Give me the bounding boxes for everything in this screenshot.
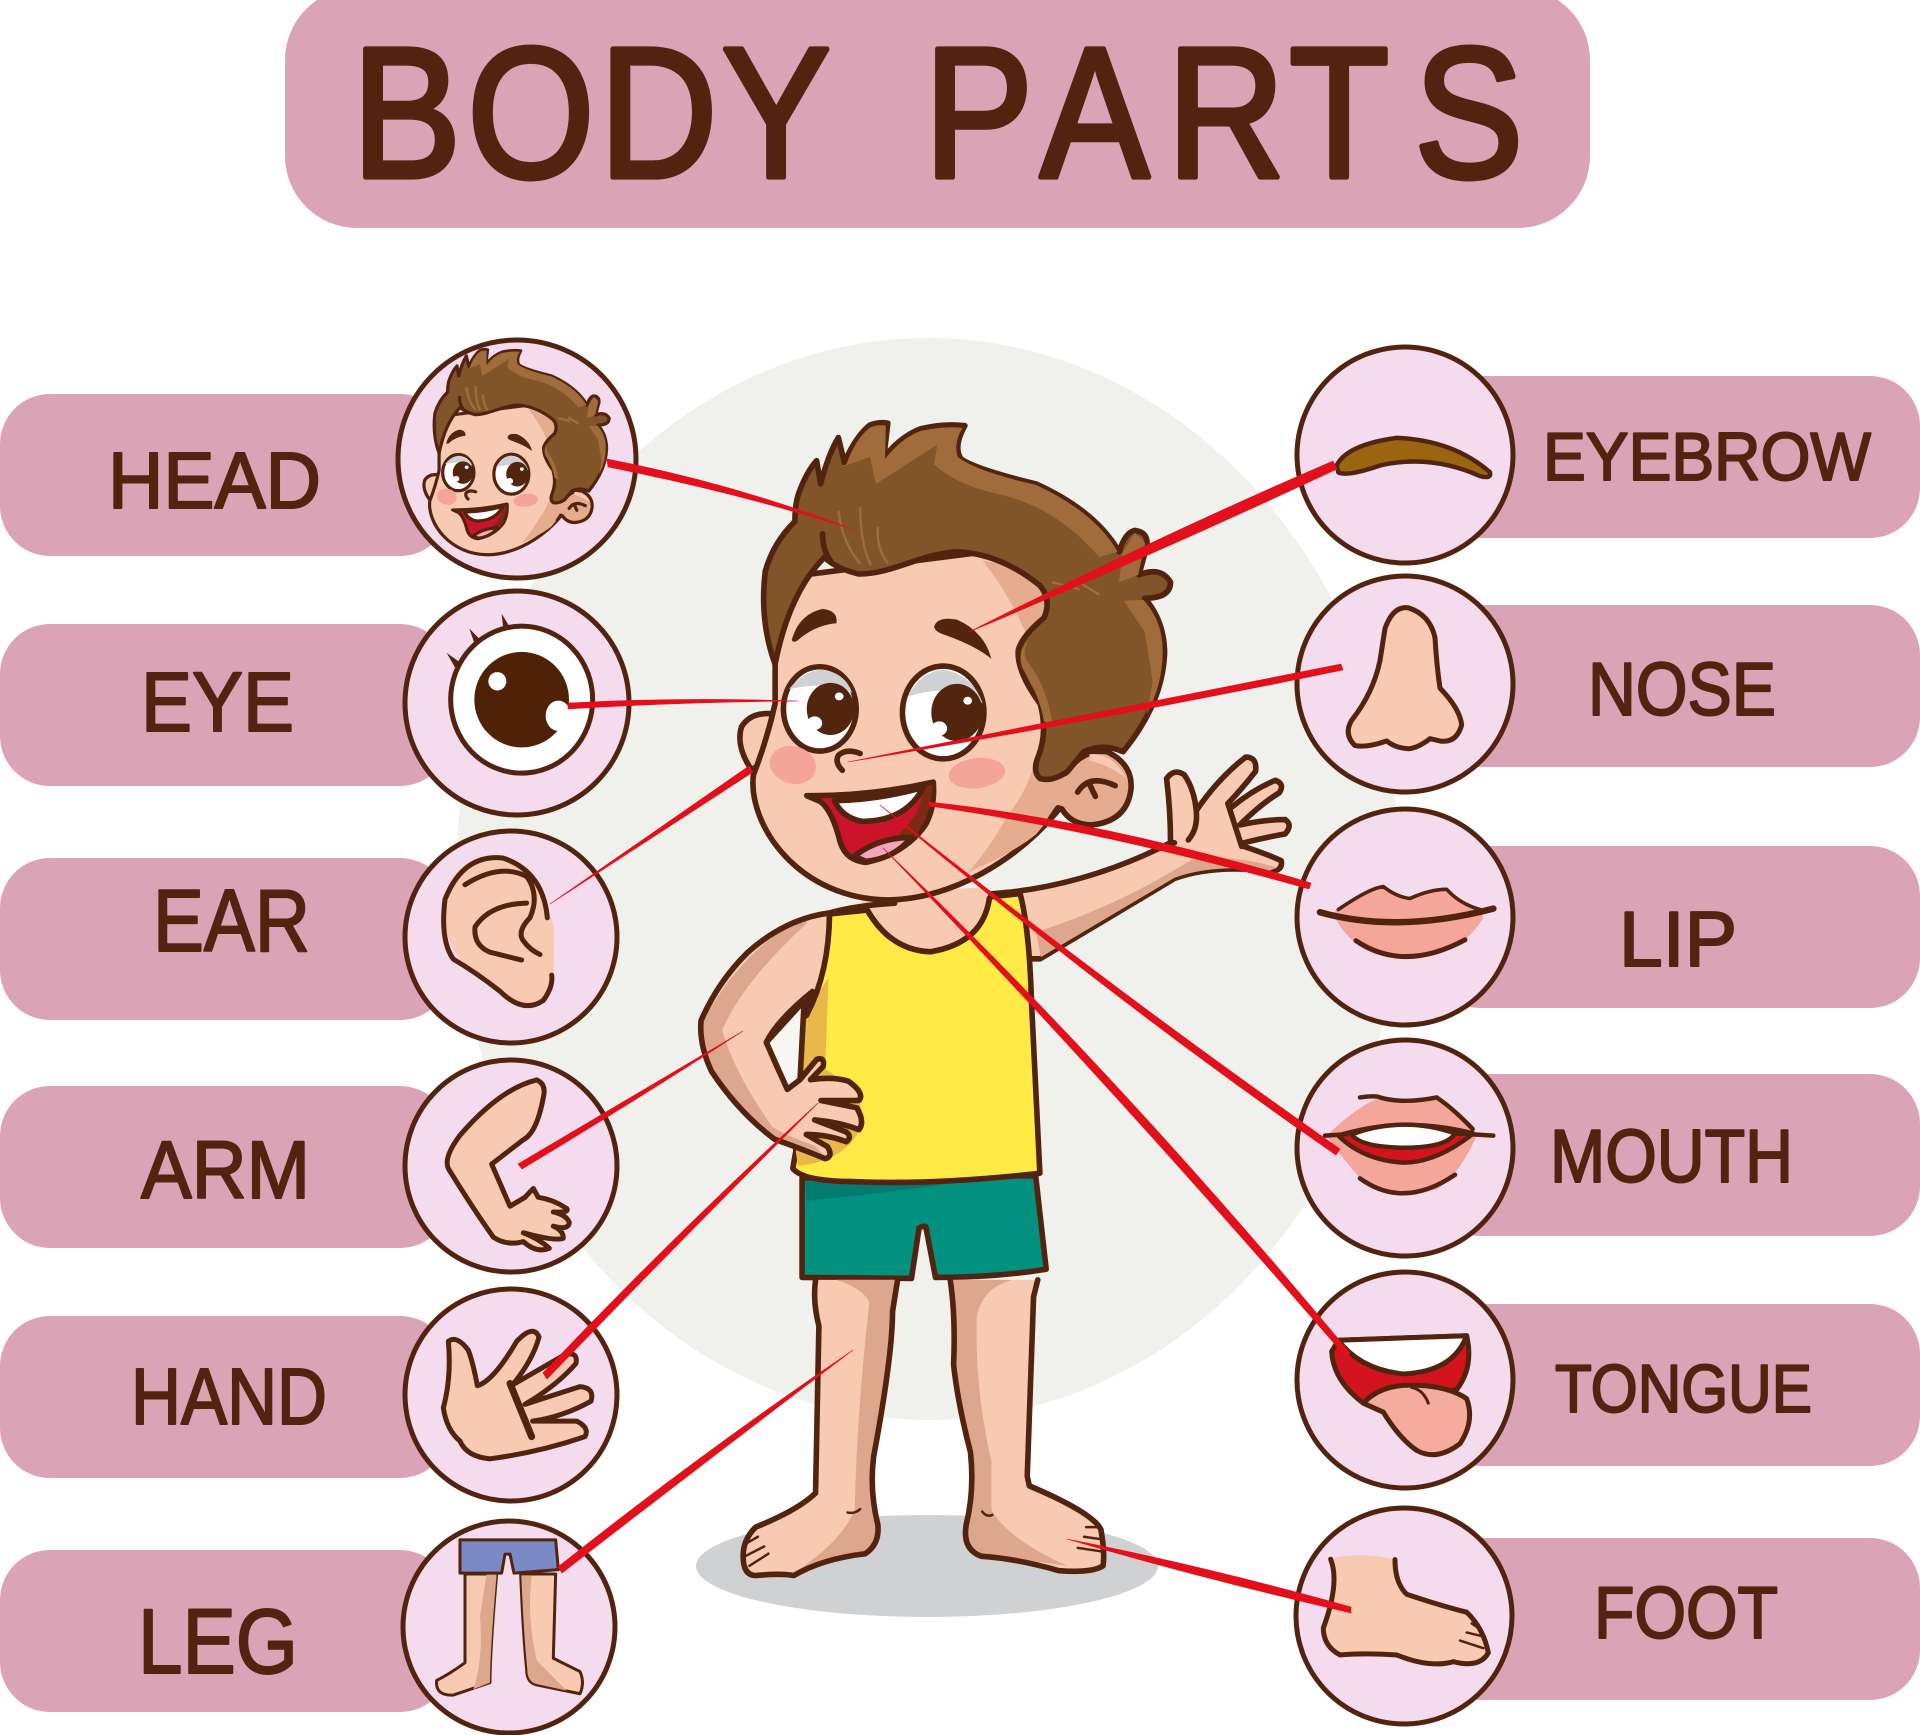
shorts	[802, 1176, 1046, 1278]
icon: lip	[1297, 809, 1513, 1025]
boy raised arm	[977, 757, 1289, 959]
line: foot	[1067, 1539, 1351, 1613]
line: lip	[929, 802, 1311, 889]
face shadow	[968, 739, 1076, 872]
icon: arm	[405, 1060, 617, 1272]
ground shadow	[696, 1515, 1158, 1617]
pointer lines	[518, 459, 1351, 1613]
bent arm	[701, 903, 895, 1159]
cheeks	[763, 739, 1007, 792]
mouth	[807, 782, 934, 862]
line: tongue	[883, 848, 1350, 1357]
boy head	[740, 423, 1171, 900]
right label pills	[1430, 376, 1920, 1700]
line: eye	[568, 699, 798, 709]
right leg	[950, 1280, 1104, 1571]
icon: ear	[405, 831, 617, 1043]
icon: tongue	[1297, 1272, 1513, 1488]
line: nose	[848, 664, 1343, 762]
icon: foot	[1296, 1508, 1512, 1724]
icon: leg	[403, 1521, 615, 1733]
label: ear: EAR	[153, 871, 310, 970]
label: arm: ARM	[141, 1125, 310, 1216]
hair highlights	[838, 425, 1118, 557]
eyebrows	[792, 609, 991, 659]
nose	[837, 751, 860, 770]
icon: eyebrow	[1297, 347, 1513, 563]
line: head	[607, 459, 852, 529]
line: arm	[518, 1031, 743, 1169]
line: eyebrow	[969, 461, 1337, 632]
label: eye: EYE	[141, 655, 294, 749]
label: foot: FOOT	[1594, 1573, 1778, 1654]
boy body	[701, 887, 1104, 1576]
icon: head	[398, 340, 636, 578]
icon: nose	[1297, 576, 1513, 792]
label: head: HEAD	[108, 436, 321, 525]
right eye	[902, 666, 984, 759]
label: eyebrow: EYEBROW	[1543, 419, 1871, 495]
icon: eye	[405, 591, 629, 815]
label: nose: NOSE	[1588, 647, 1776, 731]
label: leg: LEG	[138, 1591, 298, 1693]
icon: hand	[405, 1289, 617, 1501]
line: ear	[550, 766, 753, 904]
label: lip: LIP	[1619, 895, 1737, 983]
right ear	[1050, 751, 1131, 825]
boy character	[701, 423, 1289, 1576]
icon: mouth	[1297, 1040, 1513, 1256]
title text: BODY PARTS	[352, 9, 1523, 217]
label: mouth: MOUTH	[1550, 1114, 1793, 1198]
line: hand	[543, 1103, 818, 1379]
face	[753, 543, 1080, 900]
label: tongue: TONGUE	[1555, 1351, 1812, 1427]
hair	[764, 423, 1171, 779]
title banner	[285, 0, 1590, 228]
line: mouth	[880, 805, 1340, 1155]
tank top	[793, 887, 1040, 1182]
label: hand: HAND	[131, 1352, 327, 1441]
background circle	[456, 338, 1400, 1420]
left ear	[740, 714, 775, 770]
left eye	[783, 667, 856, 751]
left label pills	[0, 394, 450, 1712]
line: leg	[558, 1350, 853, 1573]
left leg	[743, 1280, 898, 1576]
